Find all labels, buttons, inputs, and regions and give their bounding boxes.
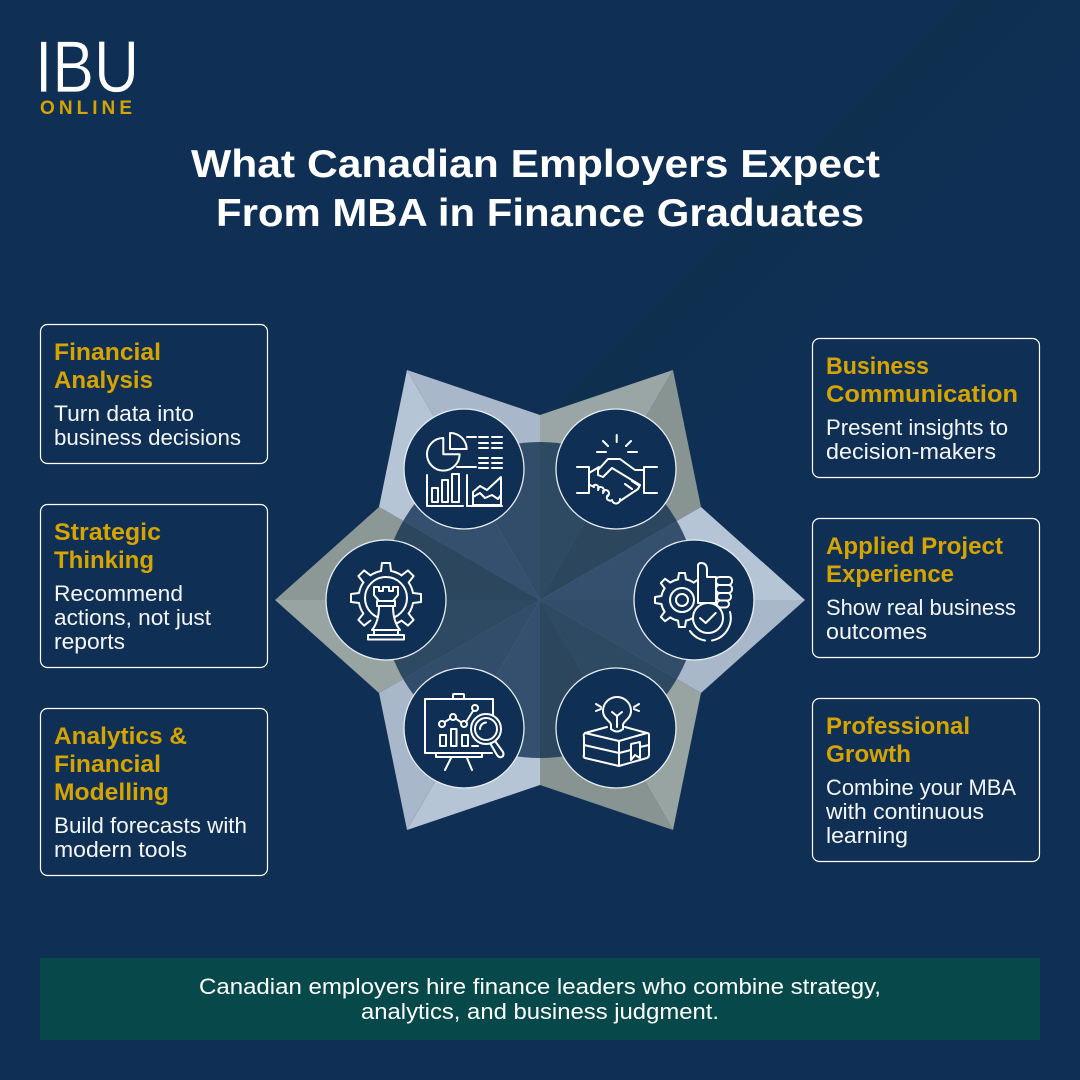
panel: Professional Growth: Growth [826, 741, 911, 768]
panel: Applied Project Experience: Experience [826, 561, 954, 588]
panel: Financial Analysis: Analysis [54, 367, 153, 394]
icon: presentation board with magnifier [404, 668, 524, 788]
callout: closing statement: analytics, and business judgment. [361, 999, 719, 1024]
panel: Analytics and Financial Modelling: Build forecasts with [54, 813, 247, 838]
panel: Strategic Thinking: actions, not just [54, 605, 211, 630]
panel: Financial Analysis: Turn data into [54, 401, 194, 426]
panel: Business Communication: Present insights to [826, 415, 1008, 440]
logo: IBU Online: IBU [35, 27, 139, 108]
panel: Professional Growth: learning [826, 823, 908, 848]
panel: Strategic Thinking [40, 504, 268, 668]
panel: Professional Growth: Combine your MBA [826, 775, 1016, 800]
panel: Analytics and Financial Modelling [40, 708, 268, 876]
panel: Strategic Thinking: Strategic [54, 519, 161, 546]
panel: Analytics and Financial Modelling: Financial [54, 751, 161, 778]
panel: Business Communication: decision-makers [826, 439, 996, 464]
panel: Business Communication [812, 338, 1040, 478]
title: What Canadian Employers Expect [191, 143, 880, 186]
panel: Analytics and Financial Modelling: Analytics & [54, 723, 187, 750]
panel: Analytics and Financial Modelling: modern tools [54, 837, 187, 862]
panel: Analytics and Financial Modelling: Modelling [54, 779, 169, 806]
panel: Strategic Thinking: Thinking [54, 547, 154, 574]
callout: closing statement: Canadian employers hire finance leaders who combine strategy, [199, 974, 881, 999]
panel: Strategic Thinking: Recommend [54, 581, 183, 606]
panel: Professional Growth: with continuous [825, 799, 984, 824]
title: From MBA in Finance Graduates [216, 192, 864, 235]
icon: lightbulb on books [556, 668, 676, 788]
title [191, 143, 880, 235]
panel: Applied Project Experience [812, 518, 1040, 658]
panel: Strategic Thinking: reports [54, 629, 125, 654]
panel: Applied Project Experience: outcomes [826, 619, 927, 644]
panel: Business Communication: Communication [826, 381, 1018, 408]
panel: Business Communication: Business [826, 353, 929, 380]
panel: Professional Growth: Professional [826, 713, 970, 740]
panel: Applied Project Experience: Applied Project [826, 533, 1003, 560]
panel: Financial Analysis [40, 324, 268, 464]
panel: Financial Analysis: business decisions [54, 425, 241, 450]
icon: handshake [556, 409, 676, 529]
icon: gear, thumbs up and check [634, 540, 754, 660]
chart: six-point star hub [275, 370, 805, 830]
icon: chess rook and gear [326, 540, 446, 660]
logo: IBU Online: ONLINE [40, 98, 132, 119]
callout: closing statement [40, 958, 1040, 1040]
panel: Applied Project Experience: Show real business [826, 595, 1016, 620]
panel: Professional Growth [812, 698, 1040, 862]
icon: charts and reports [404, 409, 524, 529]
panel: Financial Analysis: Financial [54, 339, 161, 366]
